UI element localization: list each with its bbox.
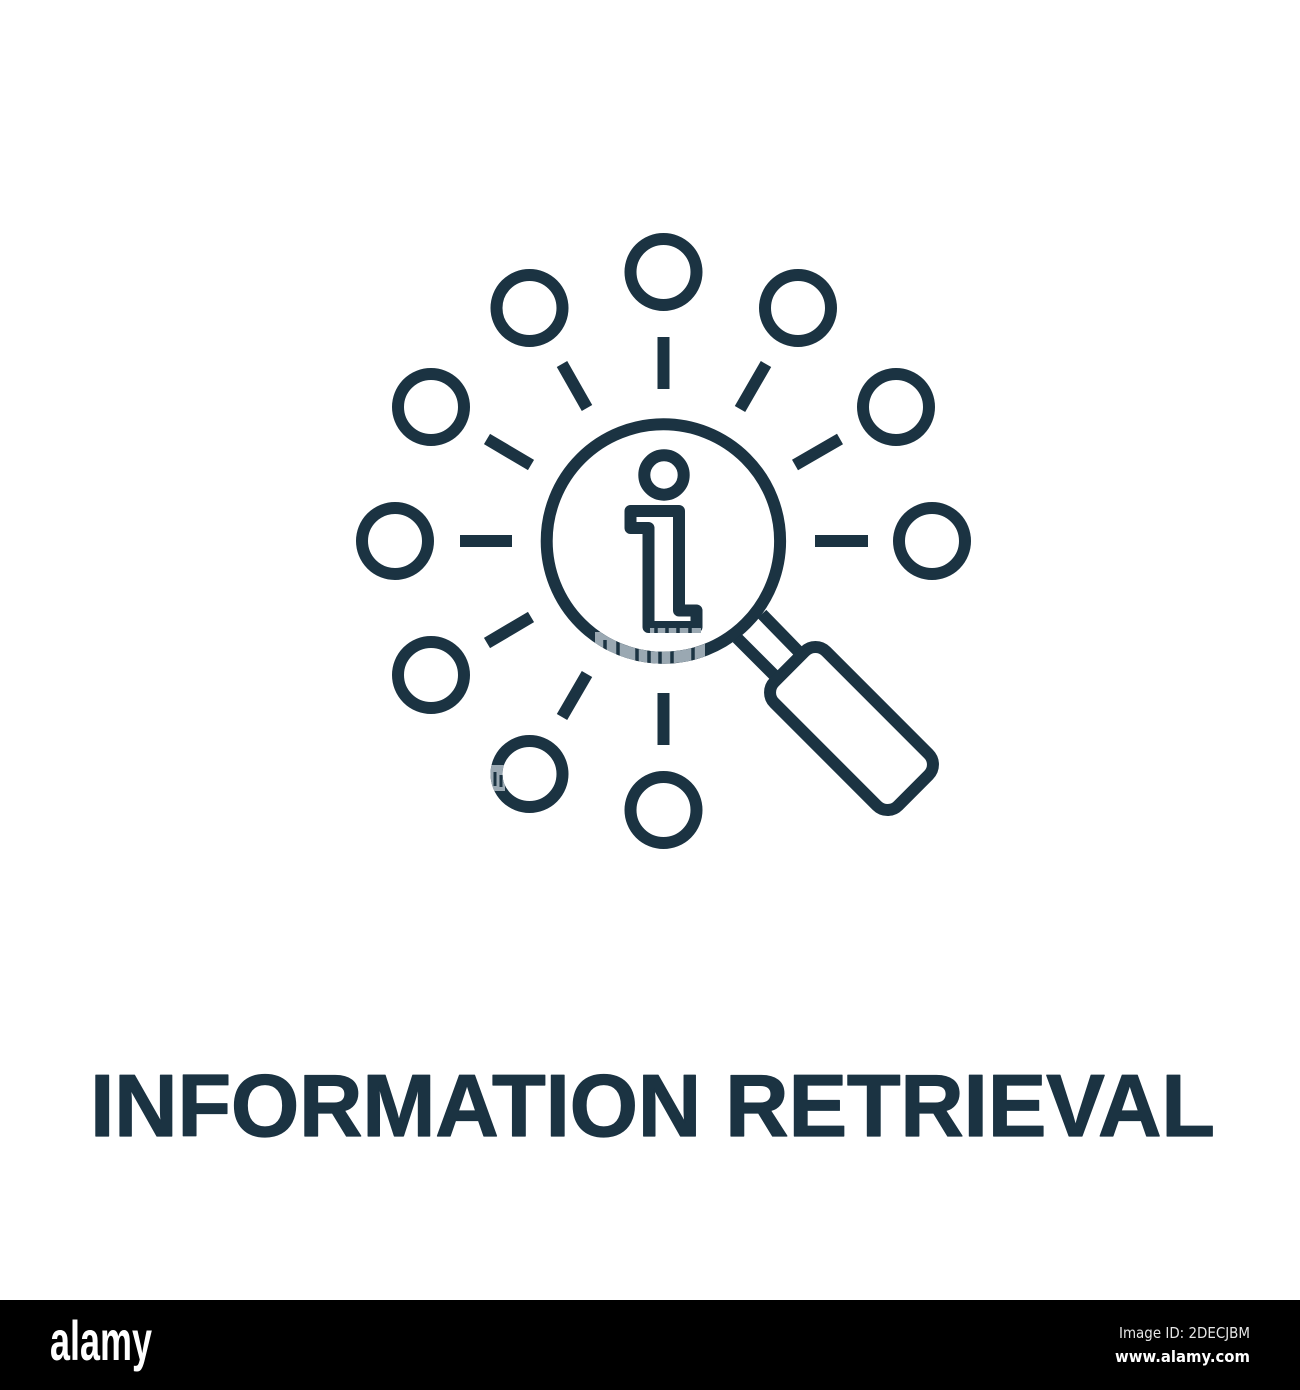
website: www.alamy.com bbox=[1115, 1347, 1250, 1366]
icon: information retrieval bbox=[362, 239, 965, 843]
watermark overlay on node bbox=[490, 765, 505, 791]
watermark overlay on letter i bbox=[650, 628, 701, 633]
footer bar bbox=[0, 1300, 1300, 1390]
image id: Image ID: 2DECJBM bbox=[1119, 1324, 1250, 1342]
icon: information letter i bbox=[630, 455, 696, 627]
icon: magnifier neck bbox=[737, 614, 799, 676]
icon: outer node circles bbox=[362, 239, 965, 843]
title: INFORMATION RETRIEVAL bbox=[90, 1056, 1215, 1155]
icon: magnifier handle bbox=[764, 641, 939, 816]
footer logo: alamy bbox=[50, 1309, 152, 1372]
icon: magnifier lens bbox=[547, 424, 780, 658]
watermark overlay on lens bbox=[595, 632, 705, 664]
icon: connector dashes bbox=[460, 337, 868, 745]
